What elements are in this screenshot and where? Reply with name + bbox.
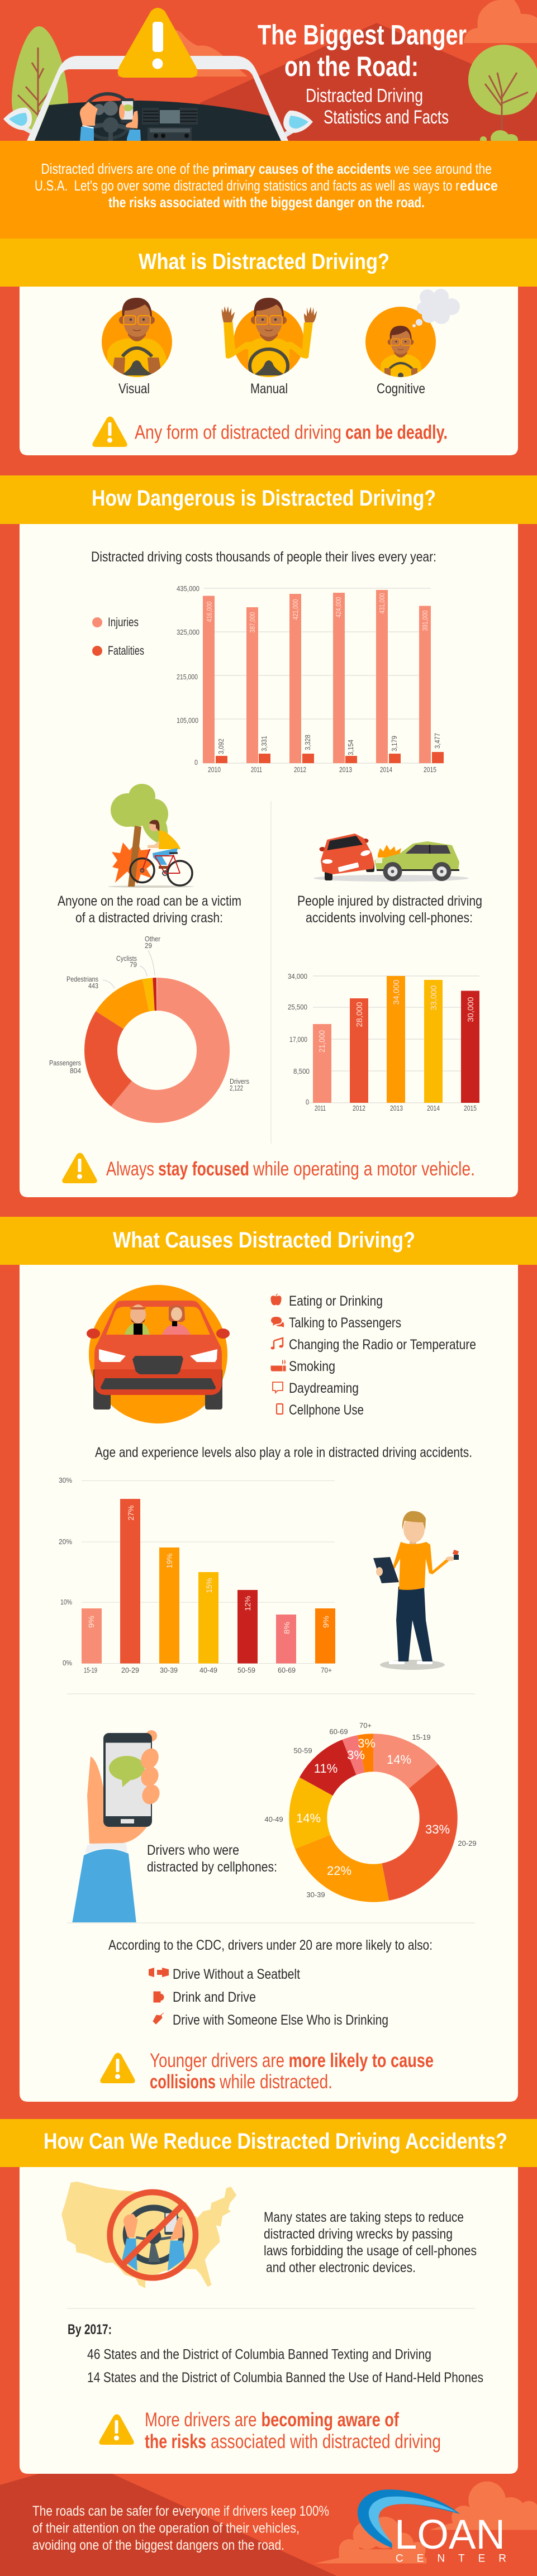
bar chart: cell-phone injuries: 33,000	[429, 985, 439, 1010]
heading: what is distracted driving	[0, 239, 537, 287]
bar chart: cell-phone injuries: 17,000	[289, 1035, 307, 1044]
text: many states: laws forbidding the usage of cell-phones	[264, 2243, 477, 2259]
bar chart: cell-phone injuries: 2013	[390, 1104, 403, 1112]
bar chart: injuries and fatalities: 105,000	[177, 716, 198, 725]
title: Distracted Driving	[306, 85, 423, 106]
intro band: primary causes of the accidents	[212, 160, 391, 177]
heading: how dangerous	[0, 475, 537, 524]
bar chart: age groups: 15-19	[84, 1666, 97, 1674]
dashboard	[35, 94, 281, 141]
bar chart: cell-phone injuries: 2011	[315, 1104, 326, 1112]
bar chart: injuries and fatalities: 215,000	[177, 673, 198, 681]
icon: cognitive driver	[365, 289, 460, 378]
text: cell-phones: accidents involving cell-phones:	[306, 910, 473, 926]
donut chart: age of distracted drivers: 70+	[359, 1721, 372, 1730]
bar chart: injuries and fatalities: 416,000	[205, 601, 213, 622]
text: lives: Distracted driving costs thousands of people their lives every year:	[91, 549, 436, 565]
hand: right	[304, 307, 317, 322]
bar chart: age groups: 9%	[321, 1616, 330, 1628]
icon: no phone map	[61, 2182, 236, 2288]
bar chart: age groups	[59, 1476, 335, 1674]
callout: Always	[106, 1158, 154, 1180]
heading: what is distracted driving: What is Distracted Driving?	[139, 249, 389, 274]
icon: phone	[277, 1404, 283, 1414]
title: The Biggest Danger	[258, 19, 467, 50]
divider	[67, 1693, 475, 1694]
bar chart: cell-phone injuries: 25,500	[288, 1003, 307, 1011]
list: under 20 behaviours: Drive Without a Seatbelt	[173, 1966, 300, 1982]
bar chart: age groups: 30-39	[160, 1666, 178, 1674]
callout: becoming aware of	[262, 2409, 399, 2431]
callout	[106, 1158, 475, 1180]
logo: loan center: LOAN	[395, 2511, 505, 2558]
heading: how dangerous: How Dangerous is Distracted Driving?	[92, 486, 436, 511]
title: on the Road:	[284, 51, 419, 82]
donut chart: road victims: 804	[70, 1066, 81, 1075]
bar chart: cell-phone injuries: 0	[306, 1098, 309, 1106]
donut chart: road victims: 79	[130, 960, 137, 969]
donut chart: age of distracted drivers: 22%	[327, 1864, 351, 1878]
bar chart: injuries and fatalities: 387,000	[248, 612, 256, 632]
text: many states: Many states are taking steps to reduce	[264, 2210, 464, 2225]
callout: collisions	[150, 2071, 216, 2093]
donut chart: road victims: Other	[145, 935, 161, 943]
icon: warning	[100, 2053, 135, 2083]
intro band: we see around the	[394, 160, 492, 177]
bar chart: injuries and fatalities: 2010	[208, 765, 221, 774]
donut chart: age of distracted drivers: 3%	[347, 1748, 365, 1762]
donut chart: age of distracted drivers: 40-49	[264, 1815, 283, 1823]
intro band: Distracted drivers are one of the	[41, 160, 209, 177]
donut chart: age of distracted drivers: 30-39	[306, 1891, 325, 1899]
icon: car with distracted passengers	[87, 1285, 230, 1423]
heading: what causes: What Causes Distracted Driving?	[113, 1228, 415, 1253]
divider	[67, 1922, 475, 1923]
bar chart: age groups: 50-59	[237, 1666, 255, 1674]
icon: warning	[62, 1153, 97, 1183]
side mirror: right	[283, 111, 313, 137]
bar chart: age groups: 0%	[63, 1659, 72, 1667]
bar chart: injuries and fatalities: 2012	[294, 765, 306, 774]
warning sign	[118, 8, 197, 78]
list: causes: Eating or Drinking	[289, 1293, 383, 1309]
text: cell-phones: People injured by distracted driving	[297, 893, 482, 909]
bar chart: cell-phone injuries: 21,000	[317, 1030, 327, 1053]
bar chart: age groups: 19%	[165, 1553, 174, 1569]
donut chart: age of distracted drivers: 11%	[314, 1761, 338, 1775]
text: cell-phones	[297, 893, 482, 926]
callout: more likely to cause	[288, 2050, 434, 2072]
list: causes: Changing the Radio or Temperature	[289, 1337, 476, 1353]
thought bubble	[412, 289, 460, 327]
text: many states	[264, 2210, 477, 2275]
bar chart: injuries and fatalities: 0	[194, 758, 198, 766]
callout: while operating a motor vehicle.	[253, 1158, 475, 1180]
cloud: behind warning sign	[114, 30, 248, 77]
donut chart: road victims: 443	[88, 982, 98, 990]
hands and phone	[80, 98, 141, 141]
legend	[92, 615, 144, 658]
icon: bottle	[153, 2013, 164, 2024]
text: drivers distracted by cellphones: Drivers who were	[147, 1842, 239, 1858]
icon: man with tablet and keys	[373, 1511, 459, 1670]
red car	[320, 834, 374, 880]
bar chart: injuries and fatalities: 424,000	[334, 597, 343, 618]
bar chart: injuries and fatalities: 3,179	[390, 736, 398, 751]
icon: visual driver	[102, 298, 172, 377]
intro band: the risks associated with the biggest danger on the road.	[108, 194, 425, 211]
list: causes: Talking to Passengers	[289, 1315, 401, 1331]
donut chart: age of distracted drivers: 14%	[296, 1811, 321, 1825]
bar chart: injuries and fatalities: 3,477	[433, 733, 441, 749]
console	[142, 108, 198, 141]
text: cdc: According to the CDC, drivers under 20 are more likely to also:	[108, 1937, 433, 1953]
icon: music note	[274, 1338, 283, 1348]
bar chart: injuries and fatalities: 391,000	[421, 610, 429, 631]
heading: how can we reduce	[0, 2119, 537, 2167]
bar chart: injuries and fatalities: 431,000	[378, 593, 386, 613]
text: by 2017	[68, 2322, 483, 2385]
bar chart: age groups: 9%	[87, 1616, 96, 1628]
callout: More drivers are	[145, 2409, 257, 2431]
donut chart: age of distracted drivers: 50-59	[293, 1746, 312, 1755]
icon: hand holding phone	[72, 1730, 163, 1923]
callout: the risks	[145, 2431, 206, 2453]
callout	[150, 2050, 434, 2093]
title	[258, 19, 467, 128]
bar chart: injuries and fatalities: 2013	[339, 765, 352, 774]
list: under 20 behaviours: Drink and Drive	[173, 1989, 256, 2005]
label: visual: Visual	[118, 381, 150, 397]
icon: car collision	[313, 834, 469, 882]
donut chart: road victims: 29	[145, 941, 152, 950]
list: causes: Cellphone Use	[289, 1402, 364, 1418]
footer text	[32, 2503, 329, 2553]
bar chart: injuries and fatalities: 3,154	[346, 740, 355, 755]
hero illustration	[3, 0, 537, 147]
label: manual: Manual	[250, 381, 288, 397]
bar chart: injuries and fatalities: 3,092	[217, 739, 225, 754]
bar chart: injuries and fatalities: 421,000	[291, 599, 300, 620]
text: by 2017: By 2017:	[68, 2322, 112, 2337]
bar chart: cell-phone injuries	[288, 972, 479, 1112]
legend: Fatalities	[108, 644, 144, 658]
donut chart: age of distracted drivers: 14%	[387, 1753, 411, 1766]
cloud: top right	[464, 0, 537, 43]
heading: what causes	[0, 1217, 537, 1265]
bar chart: cell-phone injuries: 34,000	[288, 972, 307, 980]
bar chart: age groups: 12%	[243, 1596, 252, 1611]
donut chart: road victims	[49, 935, 249, 1106]
icon: warning	[92, 417, 127, 447]
text: drivers distracted by cellphones: distracted by cellphones:	[147, 1859, 277, 1875]
list: causes	[270, 1293, 476, 1418]
vertical divider	[270, 801, 272, 1144]
logo: loan center	[358, 2489, 506, 2564]
bar chart: cell-phone injuries: 28,000	[355, 1002, 364, 1027]
bar chart: injuries and fatalities: 2015	[424, 765, 436, 774]
text: victim	[58, 893, 241, 926]
list: under 20 behaviours: Drive with Someone Else Who is Drinking	[173, 2012, 388, 2028]
donut chart: road victims: Pedestrians	[66, 975, 98, 983]
bar chart: age groups: 27%	[126, 1505, 135, 1521]
footer mountain	[0, 2461, 337, 2576]
callout: associated with distracted driving	[211, 2431, 441, 2453]
footer clouds	[315, 2482, 537, 2563]
panel: how dangerous	[20, 524, 518, 1197]
donut chart: age of distracted drivers: 15-19	[412, 1733, 431, 1741]
icon: chat outline	[273, 1382, 283, 1393]
bar chart: injuries and fatalities: 3,328	[303, 735, 312, 750]
driver figures	[125, 1304, 191, 1335]
bar chart: injuries and fatalities: 435,000	[177, 584, 199, 593]
icon: warning	[99, 2415, 134, 2445]
bar chart: age groups: 15%	[205, 1578, 213, 1593]
bar chart: cell-phone injuries: 2012	[353, 1104, 365, 1112]
bar chart: injuries and fatalities: 3,331	[260, 736, 268, 751]
footer text: avoiding one of the biggest dangers on the road.	[32, 2537, 284, 2553]
footer text: of their attention on the operation of their vehicles,	[32, 2521, 300, 2536]
donut chart: age of distracted drivers: 3%	[358, 1736, 376, 1750]
bar chart: injuries and fatalities: 2011	[251, 765, 262, 774]
bar chart: age groups: 20-29	[121, 1666, 139, 1674]
bar chart: age groups: 8%	[282, 1622, 291, 1634]
intro band: educe	[460, 177, 498, 194]
icon: manual driver	[222, 298, 317, 383]
bar chart: age groups: 60-69	[278, 1666, 296, 1674]
text: age: Age and experience levels also play a role in distracted driving accidents.	[95, 1445, 472, 1460]
callout: while distracted.	[219, 2071, 332, 2093]
donut chart: road victims: Cyclists	[116, 954, 137, 963]
text: victim: Anyone on the road can be a victim	[58, 893, 241, 909]
windshield frame	[27, 56, 288, 141]
green car	[374, 841, 459, 881]
icon: seatbelt	[149, 1968, 169, 1977]
icon: cyclist hitting tree	[108, 784, 194, 888]
callout: stay focused	[158, 1158, 249, 1180]
title: Statistics and Facts	[324, 107, 449, 128]
callout: Younger drivers are	[150, 2050, 284, 2072]
text: many states: and other electronic devices.	[266, 2260, 416, 2275]
bar chart: cell-phone injuries: 30,000	[466, 997, 476, 1022]
text: many states: distracted driving wrecks by passing	[264, 2226, 453, 2242]
icon: beer mug	[154, 1992, 164, 2002]
tree: left	[12, 26, 68, 131]
legend: Injuries	[108, 615, 139, 629]
divider	[67, 2308, 475, 2309]
icon: cigarette	[271, 1360, 286, 1371]
text: victim: of a distracted driving crash:	[75, 910, 223, 926]
list: causes: Daydreaming	[289, 1380, 359, 1396]
bar chart: cell-phone injuries: 8,500	[293, 1067, 310, 1075]
bar chart: cell-phone injuries: 34,000	[392, 980, 401, 1004]
footer text: The roads can be safer for everyone if drivers keep 100%	[32, 2503, 329, 2519]
icon: apple	[271, 1294, 281, 1305]
text: drivers distracted by cellphones	[147, 1842, 277, 1875]
mountain	[200, 23, 537, 141]
donut chart: road victims: 2,122	[230, 1084, 243, 1092]
donut chart: age of distracted drivers: 60-69	[329, 1727, 348, 1736]
rider	[148, 820, 180, 869]
list: causes: Smoking	[289, 1359, 335, 1374]
icon: speech bubbles	[271, 1317, 284, 1327]
panel: what is distracted driving	[20, 287, 518, 455]
callout	[145, 2409, 441, 2453]
bar chart: age groups: 10%	[60, 1598, 72, 1606]
hand: left	[222, 306, 235, 322]
text: by 2017: 46 States and the District of Columbia Banned Texting and Driving	[87, 2346, 431, 2362]
steering wheel	[83, 94, 134, 141]
side mirror: left	[3, 108, 39, 139]
bar chart: injuries and fatalities	[177, 584, 444, 774]
list: under 20 behaviours	[149, 1966, 388, 2028]
logo: loan center: CENTER	[396, 2553, 506, 2564]
bar chart: cell-phone injuries: 2014	[427, 1104, 440, 1112]
callout: can be deadly.	[345, 421, 448, 444]
bar chart: age groups: 20%	[59, 1537, 72, 1546]
donut chart: age of distracted drivers: 20-29	[458, 1839, 477, 1848]
bar chart: injuries and fatalities: 325,000	[177, 628, 199, 636]
donut chart: road victims: Drivers	[230, 1077, 249, 1085]
donut chart: road victims: Passengers	[49, 1059, 81, 1067]
intro band	[0, 141, 537, 239]
tree: right	[468, 45, 537, 147]
bar chart: age groups: 70+	[321, 1666, 332, 1674]
bicycle	[130, 849, 192, 885]
bar chart: injuries and fatalities: 2014	[380, 765, 392, 774]
panel: how can we reduce	[20, 2167, 518, 2474]
label: cognitive: Cognitive	[377, 381, 425, 397]
panel: what causes	[20, 1265, 518, 2102]
donut chart: age of distracted drivers: 33%	[425, 1822, 450, 1836]
callout: Any form of distracted driving	[135, 421, 341, 444]
bar chart: cell-phone injuries: 2015	[464, 1104, 477, 1112]
donut chart: age of distracted drivers	[264, 1721, 477, 1899]
bar chart: age groups: 30%	[59, 1476, 72, 1484]
bar chart: age groups: 40-49	[199, 1666, 217, 1674]
